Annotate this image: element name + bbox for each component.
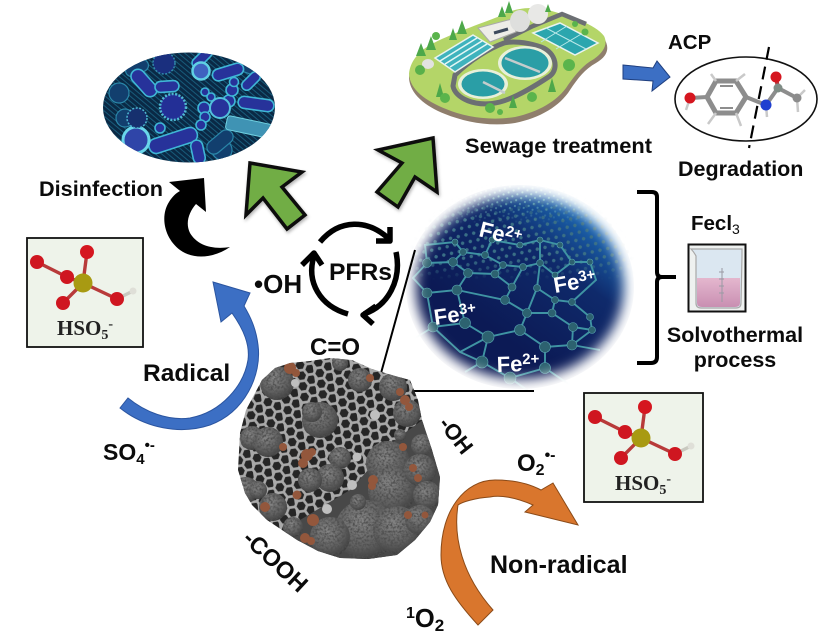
label: superoxide radical: 2 <box>536 462 545 479</box>
panel: HSO5 molecule box left: 5 <box>101 328 108 343</box>
label: PFRs: PFRs <box>329 259 392 286</box>
panel: HSO5 molecule box right: - <box>666 472 671 487</box>
panel: HSO5 molecule box right <box>584 393 703 502</box>
lines: zoom connector from particle to graphene <box>378 250 534 391</box>
arrow: green arrow to disinfection <box>246 163 305 229</box>
panel: HSO5 molecule box left: - <box>108 317 113 332</box>
label: superoxide radical: O <box>517 450 536 477</box>
panel: disinfection bacteria image <box>103 52 275 162</box>
label: singlet oxygen: 2 <box>435 616 444 635</box>
copper patches <box>260 362 428 545</box>
label: sulfate radical: 4 <box>136 451 145 468</box>
label: carboxyl group: -COOH <box>238 525 313 597</box>
panel: sewage treatment plant illustration <box>409 1 607 124</box>
label: Fe2+ top: Fe <box>477 217 508 247</box>
arrow: black curved arrow to disinfection <box>164 178 230 256</box>
label: hydroxyl radical: •OH <box>254 269 302 299</box>
panel: HSO5 molecule box left: HSO <box>57 316 101 340</box>
panel: HSO5 molecule box left <box>27 238 143 347</box>
silver beads <box>291 379 380 514</box>
textured lumps <box>233 355 441 560</box>
label: Radical: Radical <box>143 360 230 387</box>
label: Fe2+ bottom: 2+ <box>522 351 540 368</box>
heading: Sewage treatment: Sewage treatment <box>465 135 652 158</box>
label: Fe2+ bottom: Fe <box>496 351 523 377</box>
arrow: green arrow to sewage treatment <box>377 138 437 207</box>
label: Fe3+ right: 3+ <box>577 266 597 286</box>
label: ACP: ACP <box>668 31 711 54</box>
label: hydroxyl group: -OH <box>434 412 478 459</box>
panel: porous carbon particle <box>238 358 440 559</box>
icon: PFRs cycle arrows <box>302 224 397 324</box>
label: superoxide radical: •- <box>545 447 556 464</box>
label: Fe3+ left: 3+ <box>458 299 477 318</box>
heading: Disinfection: Disinfection <box>39 178 163 201</box>
arrow: blue arrow to ACP molecule <box>623 61 670 91</box>
panel: HSO5 molecule box right: 5 <box>659 483 666 498</box>
label: FeCl3: Fecl <box>691 212 732 235</box>
panel: ACP molecule ellipse <box>675 47 817 148</box>
heading: Degradation: Degradation <box>678 157 803 181</box>
panel: HSO5 molecule box right: HSO <box>615 471 659 495</box>
arrow: blue radical arrow <box>120 282 259 430</box>
panel: graphene disc with iron ions <box>406 185 635 392</box>
label: Non-radical: Non-radical <box>490 551 628 579</box>
label: Solvothermal process: process <box>694 348 776 372</box>
label: sulfate radical: •- <box>145 437 155 454</box>
icon: beaker <box>688 244 746 312</box>
arrow: orange non-radical arrow <box>441 480 578 625</box>
label: singlet oxygen: 1 <box>406 605 415 622</box>
bracket: synthesis conditions <box>637 192 676 363</box>
label: FeCl3: 3 <box>732 221 740 237</box>
label: Solvothermal process: Solvothermal <box>667 323 803 347</box>
label: C=O: C=O <box>310 334 360 361</box>
label: Fe2+ top: 2+ <box>504 223 525 243</box>
label: Fe3+ left: Fe <box>432 302 461 330</box>
label: singlet oxygen: O <box>415 605 435 633</box>
label: sulfate radical: SO <box>103 439 136 465</box>
label: Fe3+ right: Fe <box>552 269 581 298</box>
